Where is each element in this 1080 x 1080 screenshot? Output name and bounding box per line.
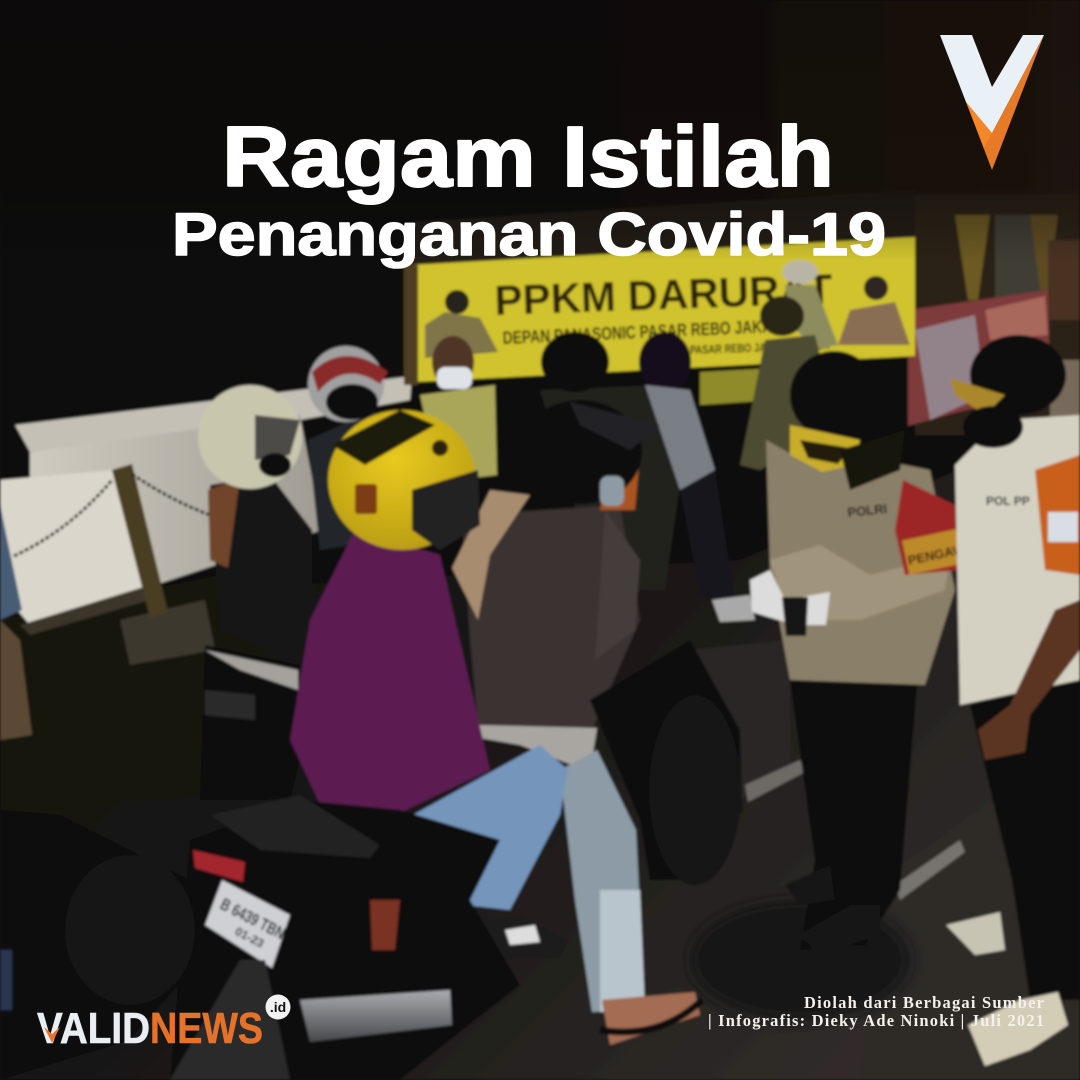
wordmark NEWS: NEWS [150,1004,263,1053]
logo: VALIDNEWS.id [37,994,290,1053]
wordmark VALID: VALID [37,1004,150,1053]
background stalls right [908,195,1080,435]
right officer white shirt [946,335,1080,1066]
black helmet [518,400,660,506]
dark gradient overlay top [0,0,1080,262]
back soldier in green uniform [740,296,825,470]
white wall [0,376,412,635]
road and ground [0,420,1080,1080]
back motorcycle [200,645,300,800]
foreground motorcycle: B 6439 TBN [217,895,288,943]
title line 2: Penanganan Covid-19 [172,201,886,268]
wordmark tip [44,1027,60,1043]
traffic police on banner [782,260,838,350]
credit line 1: Diolah dari Berbagai Sumber [804,993,1044,1012]
logo: V mark [940,35,1044,170]
yellow banner PPKM Darurat: PPKM DARURAT [494,265,833,324]
left rider with white helmet [198,385,312,660]
yellow banner PPKM Darurat: DEPAN PANASONIC PASAR REBO JAKARTA [502,315,800,348]
grey hoodie passenger [452,455,640,735]
police officer khaki uniform [750,351,983,950]
right officer white shirt: POL PP [986,494,1030,508]
chain fence and post [14,464,210,618]
yellow helmet [328,410,480,550]
yellow banner PPKM Darurat [404,190,915,405]
credits [708,993,1044,1030]
credit line 2: | Infografis: Dieky Ade Ninoki | Juli 2021 [708,1011,1044,1030]
yellow banner PPKM Darurat: PASAR REBO JAKARTA TIMUR [690,338,830,357]
background crowd [540,332,755,622]
foreground motorcycle [170,640,742,1080]
police officer khaki uniform: PENGAWAS [907,538,983,568]
police shoes [785,865,880,955]
foreground motorcycle: 01-23 [233,924,267,951]
left foreground motorbike and person [0,505,200,1080]
rider with red and white helmet [308,346,388,550]
id badge: .id [270,999,286,1015]
blue jeans [400,745,568,960]
id badge [266,994,290,1020]
police officer khaki uniform: POLRI [847,501,888,520]
title line 1: Ragam Istilah [222,110,834,205]
white washed jeans rider [560,750,702,1045]
officer in hi-vis vest with mask [420,336,497,480]
zebra waist cloth [478,725,597,772]
title [172,110,886,268]
purple shirt passenger [290,530,490,832]
